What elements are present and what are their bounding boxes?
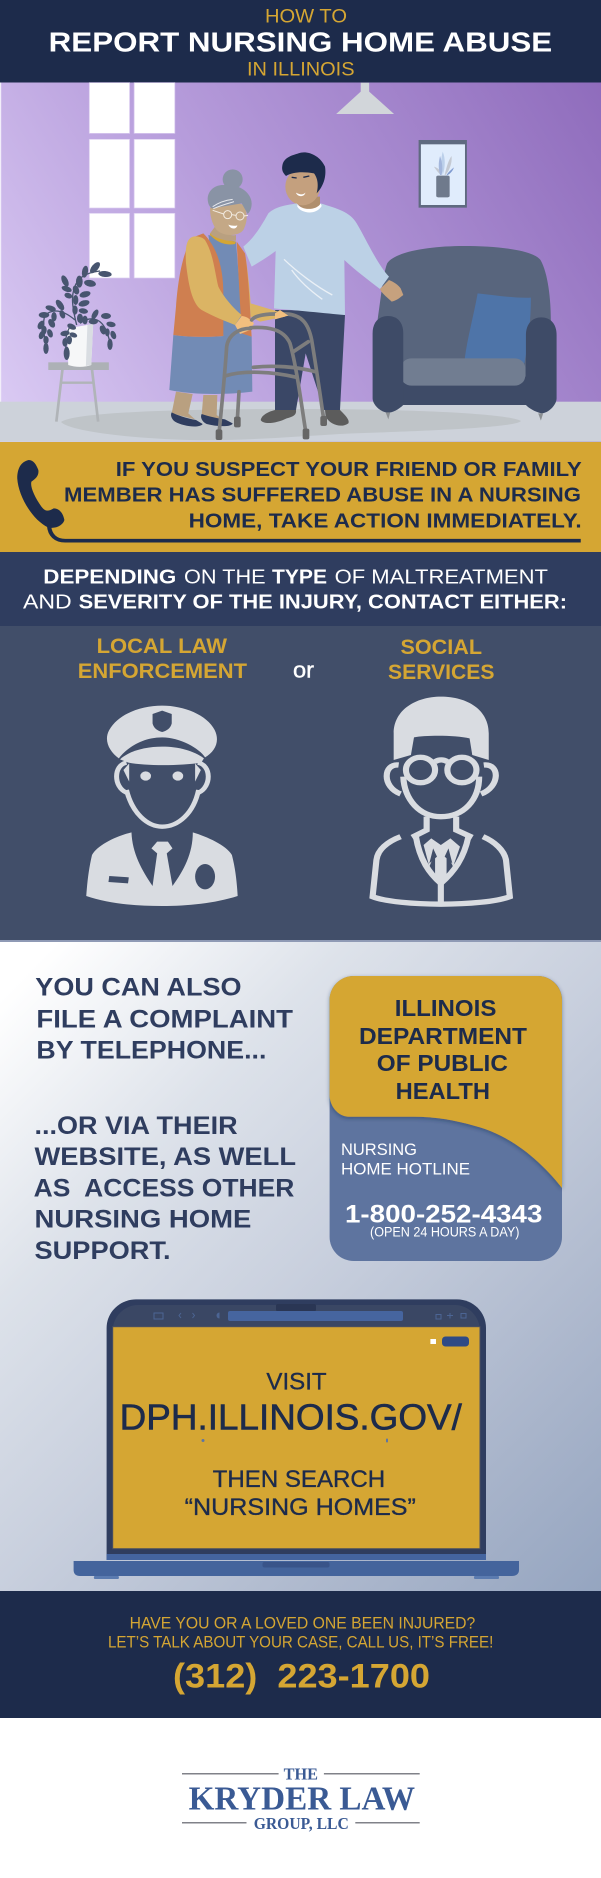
text: or via website: NURSING HOME (34, 1206, 251, 1234)
ceiling lamp (336, 83, 394, 114)
card heading: HEALTH (396, 1078, 490, 1104)
navy instruction band: SEVERITY OF THE INJURY, CONTACT EITHER: (79, 590, 567, 613)
heading: social services: SOCIAL (400, 636, 482, 659)
card heading: OF PUBLIC (377, 1050, 508, 1076)
icon: telephone handset with cord (17, 460, 581, 541)
hotline number: 1-800-252-4343 (345, 1201, 542, 1229)
text: or via website (34, 1112, 296, 1265)
card heading (359, 995, 528, 1104)
text: or via website: SUPPORT. (34, 1237, 171, 1265)
logo: The Kryder Law Group, LLC (0, 1718, 601, 1878)
hotline label (341, 1140, 470, 1178)
icon: police officer (86, 706, 238, 906)
gold callout band (0, 442, 601, 552)
laptop (74, 1299, 519, 1579)
or label: or (293, 658, 314, 683)
hotline hours: (OPEN 24 HOURS A DAY) (370, 1225, 519, 1240)
browser bar (154, 1311, 466, 1321)
card heading: DEPARTMENT (359, 1023, 528, 1049)
card heading: ILLINOIS (395, 995, 496, 1021)
header line: in illinois: IN ILLINOIS (247, 60, 354, 81)
window (89, 83, 175, 278)
text: file a complaint by telephone: YOU CAN ALSO (35, 974, 241, 1002)
call to action text: HAVE YOU OR A LOVED ONE BEEN INJURED? (130, 1614, 475, 1633)
icon: social worker (373, 697, 510, 905)
navy instruction band: DEPENDING (43, 565, 176, 588)
card: Illinois Department of Public Health hotline (330, 976, 562, 1261)
heading: local law enforcement: ENFORCEMENT (78, 660, 247, 683)
callout text (64, 458, 582, 532)
screen text (120, 1368, 462, 1521)
elderly woman with walker (169, 169, 327, 440)
text: file a complaint by telephone: FILE A COMPLAINT (36, 1006, 293, 1034)
text: or via website: WEBSITE, AS WELL (34, 1143, 296, 1171)
heading: local law enforcement (78, 635, 247, 683)
screen text: THEN SEARCH (213, 1466, 385, 1493)
laptop base (74, 1554, 519, 1579)
header line: how to: HOW TO (265, 7, 347, 28)
panel: complaint options background (0, 940, 601, 1591)
navy instruction band (0, 552, 601, 626)
navy instruction band: ON THE (184, 565, 266, 588)
logo: The Kryder Law Group, LLC: THE (284, 1764, 318, 1783)
heading: social services: SERVICES (388, 661, 494, 684)
panel: who to contact (0, 626, 601, 940)
text: file a complaint by telephone: BY TELEPHONE... (36, 1037, 266, 1065)
header banner (0, 0, 601, 82)
text: or via website: AS ACCESS OTHER (34, 1175, 294, 1203)
firm phone number: (312) 223-1700 (173, 1658, 430, 1696)
navy instruction band: OF MALTREATMENT (335, 565, 549, 588)
logo: The Kryder Law Group, LLC: KRYDER LAW (189, 1780, 415, 1817)
logo: The Kryder Law Group, LLC: GROUP, LLC (254, 1814, 349, 1833)
armchair (373, 246, 557, 421)
title: REPORT NURSING HOME ABUSE (49, 27, 552, 58)
screen text: DPH.ILLINOIS.GOV/ (120, 1396, 462, 1438)
hotline label: NURSING (341, 1140, 417, 1159)
hotline label: HOME HOTLINE (341, 1159, 470, 1178)
laptop screen (113, 1327, 480, 1549)
footer call to action (0, 1591, 601, 1718)
text: file a complaint by telephone (35, 974, 293, 1065)
heading: social services (388, 636, 494, 684)
navy instruction band: TYPE (272, 565, 327, 588)
callout text: IF YOU SUSPECT YOUR FRIEND OR FAMILY (116, 458, 582, 481)
navy instruction band: AND (23, 590, 72, 613)
call to action text: LET’S TALK ABOUT YOUR CASE, CALL US, IT’S FREE! (108, 1632, 493, 1651)
screen text: “NURSING HOMES” (185, 1494, 416, 1521)
call to action text (108, 1614, 493, 1651)
heading: local law enforcement: LOCAL LAW (97, 635, 227, 658)
callout text: HOME, TAKE ACTION IMMEDIATELY. (189, 509, 582, 532)
man in light blue sweater (243, 152, 403, 426)
callout text: MEMBER HAS SUFFERED ABUSE IN A NURSING (64, 484, 581, 507)
screen text: VISIT (266, 1368, 327, 1395)
illustration panel: room scene (0, 82, 601, 442)
framed picture (419, 140, 467, 208)
potted plant on stool (36, 260, 117, 422)
text: or via website: ...OR VIA THEIR (34, 1112, 238, 1140)
